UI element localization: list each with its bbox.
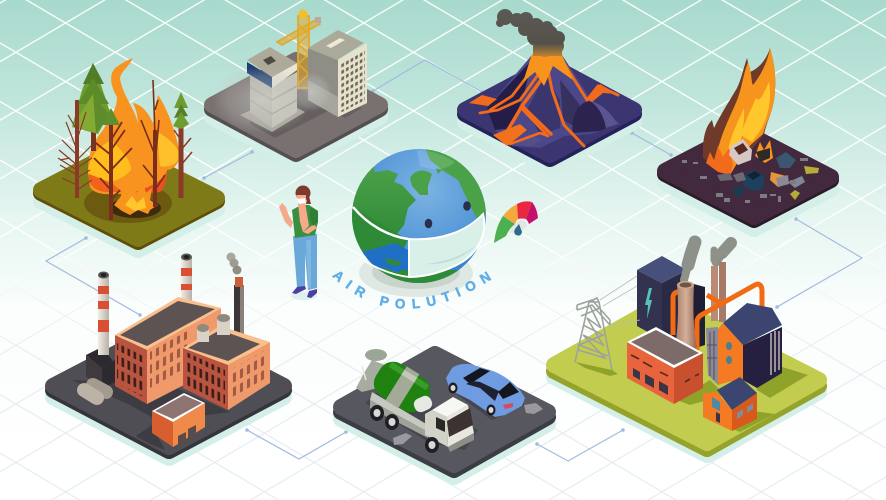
mask [409,214,484,277]
forearm [298,202,309,232]
panel: construction site [212,10,380,162]
brick building [627,327,703,404]
pipes [673,284,762,350]
shoes [292,286,306,294]
cab [425,410,448,447]
mask straps [353,207,408,239]
mixer drum [368,355,436,419]
debris [682,139,819,203]
second building [183,314,270,410]
building under construction [240,47,305,132]
flames [88,58,180,194]
fuel tanks [84,385,106,398]
panel: factory [53,252,284,458]
power lines [600,276,640,326]
small building [152,393,205,447]
icon: transmission tower [575,298,612,370]
smudges [393,433,412,445]
cooling tower [675,285,697,351]
car [446,364,525,420]
globe [350,148,490,290]
panel: power plant [554,242,819,455]
smoke [684,242,731,280]
stack centre [181,254,192,309]
dark stack with smoke [226,252,244,335]
person wearing mask [279,186,318,300]
central globe with mask [350,148,490,297]
power hall [706,303,782,388]
smoke plume [496,9,565,57]
panel: garbage fire [665,48,831,229]
raised hand [279,203,293,228]
tree: large pine [72,63,110,151]
tree: bare centre [92,108,132,220]
base block and stack [86,272,115,388]
eyes [425,219,432,228]
panel: volcano [465,9,634,167]
small house [703,377,757,431]
panel: forest fire [41,58,217,250]
rock dome [572,101,618,133]
tree: small pine [173,92,192,198]
smog [212,66,312,134]
main building [115,297,221,404]
flame [703,48,775,175]
tree: bare right [141,80,165,207]
tree: bare left [58,100,92,198]
lava flows [480,60,618,146]
connector arrows [46,60,862,461]
icon: tower crane [277,10,321,88]
hopper [356,360,385,392]
torso [292,205,318,238]
truck [356,349,478,453]
legs [293,234,317,290]
sleeve [309,207,318,226]
volcano cone [487,55,620,148]
dark block and bolt [637,256,705,350]
icon: air quality gauge [494,201,538,243]
head [296,186,310,200]
panel: vehicles [341,349,548,477]
tall building [308,30,367,117]
ground fire [114,180,158,215]
title: air polution: AIR POLUTION [332,271,492,309]
wheels [370,405,384,421]
thin chimneys [711,266,718,321]
upper arm [303,224,317,234]
